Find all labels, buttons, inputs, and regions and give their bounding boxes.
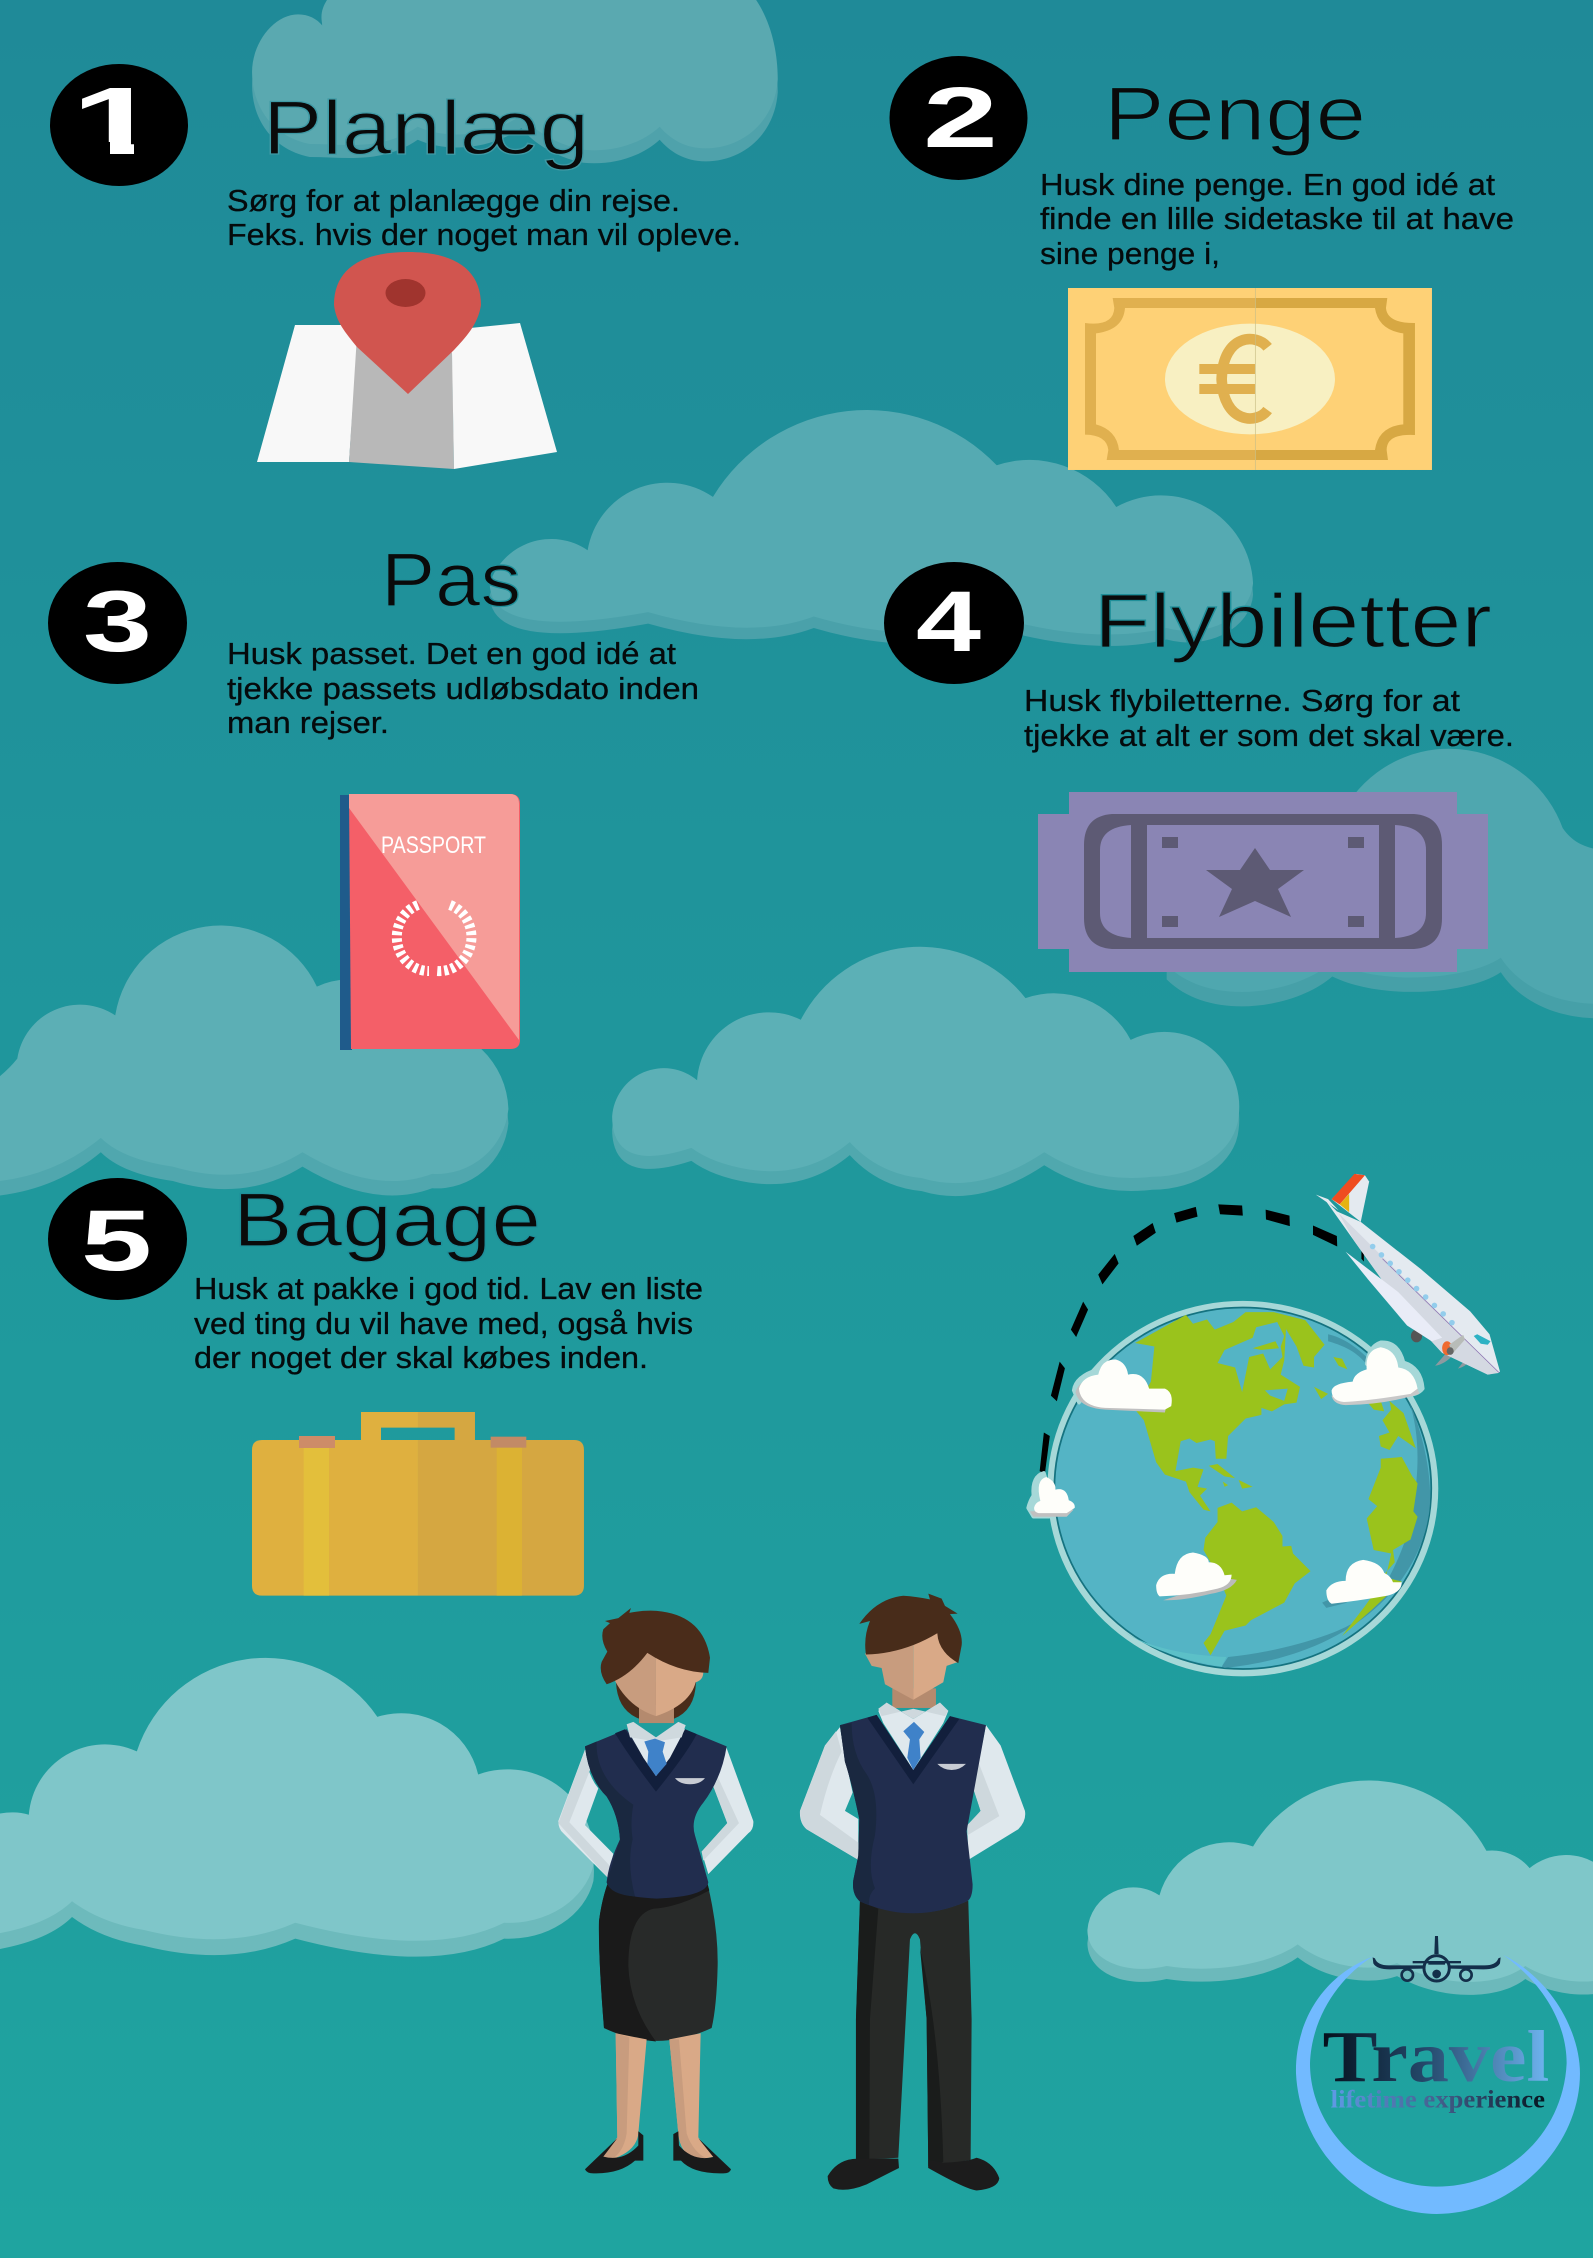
badge: number 5: 5 [81, 1193, 152, 1289]
heading: Penge: Penge [1104, 72, 1366, 157]
vest [840, 1715, 986, 1913]
skirt [599, 1884, 718, 2041]
illustration: globe with flight path [1028, 1174, 1500, 1676]
icon: map with pin [257, 252, 557, 469]
text block: Planlæg: Feks. hvis der noget man vil opleve. [227, 217, 741, 252]
cloud: lower left [0, 1658, 594, 1957]
logo: Travel lifetime experience: lifetime experience [1331, 2085, 1545, 2113]
badge: number 3: 3 [83, 574, 152, 670]
cloud: centre middle [612, 947, 1239, 1196]
globe [1047, 1301, 1438, 1676]
figure: flight attendant woman [558, 1608, 753, 2173]
text block: Pas: Husk passet. Det en god idé at [227, 636, 676, 671]
text block: Penge [1040, 167, 1514, 271]
icon: laurel wreath [397, 905, 471, 971]
text block: Pas: tjekke passets udløbsdato inden [227, 671, 699, 706]
icon: passport: PASSPORT [381, 832, 486, 859]
text block: Penge: finde en lille sidetaske til at have [1040, 201, 1514, 236]
icon: euro banknote [1068, 288, 1432, 470]
figure: flight attendant man [800, 1594, 1025, 2190]
text block: Flybiletter [1024, 683, 1514, 753]
icon: small airplane [1373, 1936, 1501, 1981]
logo: Travel lifetime experience: Travel [1323, 2016, 1549, 2097]
text block: Planlæg [227, 183, 741, 252]
text block: Flybiletter: Husk flybiletterne. Sørg for at [1024, 683, 1460, 718]
legs [603, 2033, 647, 2160]
text block: Pas: man rejser. [227, 705, 389, 740]
icon: ticket [1038, 792, 1488, 972]
vest [585, 1729, 727, 1899]
heading: Pas: Pas [381, 538, 521, 623]
flight path [1040, 1204, 1364, 1474]
airplane [1316, 1174, 1500, 1375]
continents [1135, 1312, 1418, 1655]
text block: Bagage: ved ting du vil have med, også hvis [194, 1306, 693, 1341]
text block: Penge: Husk dine penge. En god idé at [1040, 167, 1495, 202]
text block: Flybiletter: tjekke at alt er som det skal være. [1024, 718, 1514, 753]
badge: number 1 [50, 64, 188, 186]
badge: number 5 [48, 1178, 187, 1300]
badge: number 2 [890, 56, 1028, 180]
badge: number 4 [884, 562, 1024, 684]
text block: Bagage [194, 1271, 703, 1375]
text block: Bagage: der noget der skal købes inden. [194, 1340, 648, 1375]
logo: Travel lifetime experience [1296, 1936, 1580, 2214]
trousers [856, 1901, 972, 2168]
white clouds [1030, 1347, 1419, 1608]
text block: Planlæg: Sørg for at planlægge din rejse. [227, 183, 680, 218]
arms [558, 1750, 613, 1878]
text block: Penge: sine penge i, [1040, 236, 1220, 271]
cloud: centre upper [490, 410, 1253, 646]
text block: Pas [227, 636, 699, 740]
heading: Flybiletter: Flybiletter [1094, 579, 1492, 664]
cloud: lower right [1087, 1780, 1593, 1995]
bays and lakes [1218, 1322, 1288, 1401]
heading: Planlæg: Planlæg [263, 86, 589, 171]
badge: number 2: 2 [923, 70, 998, 166]
badge: number 1: 1 [71, 68, 161, 175]
badge: number 4: 4 [916, 574, 981, 670]
icon: suitcase [252, 1412, 584, 1596]
icon: passport [340, 794, 520, 1050]
cloud: right behind ticket [1167, 749, 1593, 1018]
cloud: top [252, 0, 778, 163]
cloud halos [1367, 1342, 1423, 1396]
cloud: left middle [0, 926, 508, 1195]
heading: Bagage: Bagage [233, 1178, 541, 1263]
arms [800, 1727, 858, 1860]
badge: number 3 [48, 562, 187, 684]
text block: Bagage: Husk at pakke i god tid. Lav en liste [194, 1271, 703, 1306]
